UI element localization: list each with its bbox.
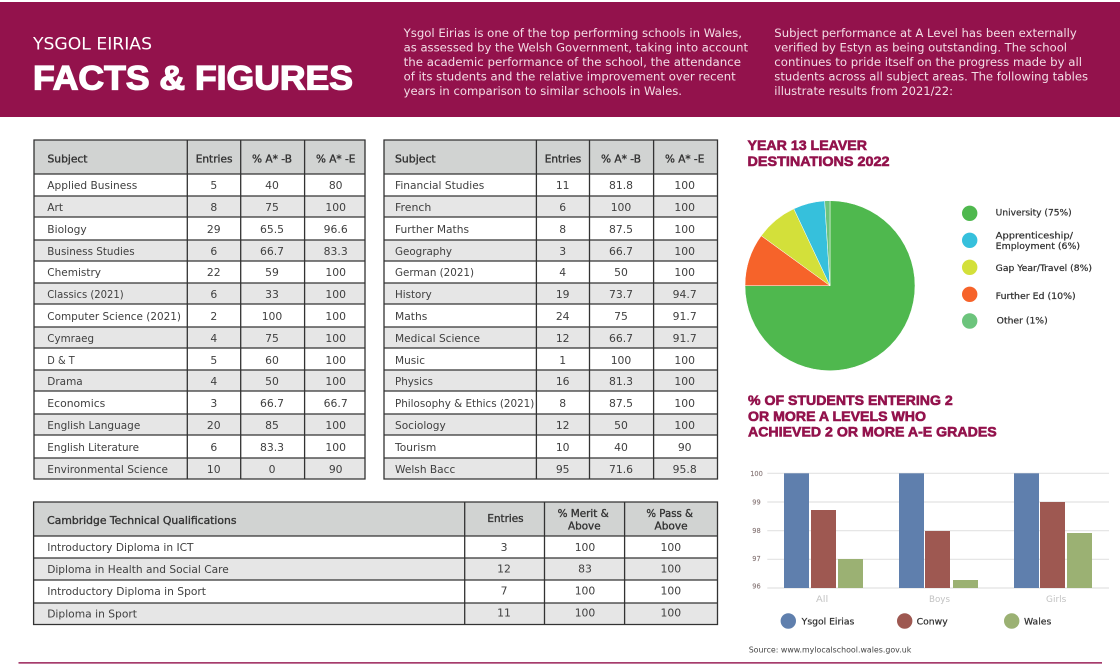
table header: [47, 508, 693, 532]
bar chart legend: Ysgol Eirias: [801, 617, 855, 627]
qualification names: Introductory Diploma in ICT: [47, 541, 194, 554]
category labels: All: [816, 595, 828, 605]
subject names: [394, 179, 534, 476]
subject names: Economics: [47, 397, 106, 410]
qualification values: 3: [501, 541, 507, 554]
subject names: Maths: [395, 310, 428, 323]
bar chart legend: Wales: [1024, 617, 1052, 627]
entries column: 6: [210, 245, 217, 258]
axis labels: 96: [752, 582, 761, 590]
qualification names: Introductory Diploma in Sport: [47, 585, 207, 598]
qualification values: [497, 541, 681, 619]
entries column: 12: [556, 419, 570, 432]
percent A* to B column: 83.3: [260, 441, 284, 454]
pie legend: Other (1%): [997, 317, 1048, 327]
category labels: Boys: [929, 595, 950, 605]
percent A* to B column: 73.7: [609, 288, 633, 301]
table header: % A* -B: [252, 153, 292, 165]
subject names: Environmental Science: [47, 463, 168, 476]
subject names: Tourism: [394, 441, 436, 454]
entries column: 8: [559, 223, 566, 236]
heading: A level grades: % OF STUDENTS ENTERING 2: [748, 392, 953, 408]
entries column: 29: [207, 223, 221, 236]
table header: % Merit &: [558, 508, 609, 520]
bar chart legend: [781, 613, 1052, 629]
heading: leaver destinations: [748, 137, 890, 169]
subject names: Geography: [395, 245, 453, 258]
percent A* to E column: 100: [674, 354, 695, 367]
qualification values: 100: [660, 563, 681, 576]
percent A* to E column: 94.7: [673, 288, 697, 301]
bars: Girls: [1014, 473, 1092, 588]
category labels: [816, 595, 1067, 605]
bar chart: A level grades: [750, 470, 1109, 605]
percent A* to E column: [324, 179, 348, 476]
title: YSGOL EIRIAS: [32, 34, 152, 54]
percent A* to E column: 100: [674, 397, 695, 410]
percent A* to E column: 91.7: [673, 310, 697, 323]
subject names: English Literature: [47, 441, 139, 454]
percent A* to B column: 40: [265, 179, 279, 192]
percent A* to B column: 50: [614, 419, 628, 432]
qualification values: 83: [578, 563, 592, 576]
qualification names: [47, 541, 229, 620]
percent A* to E column: 100: [674, 223, 695, 236]
axis labels: 98: [752, 527, 761, 535]
entries column: 6: [210, 288, 217, 301]
table header: Above: [654, 520, 688, 532]
entries column: 4: [210, 332, 217, 345]
percent A* to E column: 100: [325, 441, 346, 454]
title: FACTS & FIGURES: [33, 59, 353, 97]
table header: Entries: [196, 153, 232, 165]
entries column: 1: [559, 354, 566, 367]
table header: Entries: [487, 513, 524, 525]
percent A* to B column: 59: [265, 266, 279, 279]
table header: % Pass &: [646, 508, 693, 520]
table header: Above: [568, 520, 601, 532]
percent A* to E column: 95.8: [673, 463, 697, 476]
subject names: French: [395, 201, 431, 214]
pie legend: Employment (6%): [996, 242, 1080, 252]
subject names: Classics (2021): [47, 288, 124, 301]
qualification values: 100: [660, 606, 681, 619]
percent A* to B column: 75: [265, 201, 279, 214]
axis labels: 99: [752, 498, 761, 506]
percent A* to E column: 100: [325, 332, 346, 345]
percent A* to E column: 90: [678, 441, 692, 454]
heading: leaver destinations: DESTINATIONS 2022: [748, 153, 890, 169]
subject names: Applied Business: [47, 179, 138, 192]
qualification values: 100: [575, 606, 595, 619]
percent A* to B column: 100: [611, 201, 631, 214]
intro paragraph: school performance: years in comparison to similar schools in Wales.: [404, 84, 682, 98]
qualification values: 12: [497, 563, 511, 576]
percent A* to E column: 100: [325, 419, 346, 432]
percent A* to B column: 40: [614, 441, 628, 454]
subject names: D & T: [47, 354, 75, 367]
intro paragraph: school performance: the academic performance of the school, the attendance: [404, 55, 741, 69]
subject names: Physics: [395, 375, 433, 388]
percent A* to B column: 71.6: [609, 463, 633, 476]
percent A* to E column: 96.6: [324, 223, 348, 236]
subject names: Business Studies: [47, 245, 135, 258]
percent A* to E column: 100: [325, 288, 346, 301]
qualification values: 11: [497, 606, 511, 619]
percent A* to B column: 50: [614, 266, 628, 279]
percent A* to B column: 100: [611, 354, 631, 367]
percent A* to B column: 81.8: [609, 179, 633, 192]
intro paragraph: subject performance: illustrate results from 2021/22:: [774, 84, 953, 98]
table header: [395, 153, 705, 165]
percent A* to B column: 66.7: [260, 397, 284, 410]
subject names: Financial Studies: [395, 179, 485, 192]
entries column: 11: [556, 179, 570, 192]
table header: Subject: [48, 153, 88, 165]
entries column: 12: [556, 332, 570, 345]
percent A* to B column: 33: [265, 288, 279, 301]
heading: leaver destinations: YEAR 13 LEAVER: [748, 137, 867, 153]
entries column: 4: [210, 375, 217, 388]
intro paragraph: school performance: [403, 26, 748, 98]
entries column: 5: [210, 179, 217, 192]
entries column: 24: [556, 310, 570, 323]
percent A* to B column: [260, 179, 284, 476]
axis labels: 97: [752, 555, 761, 563]
percent A* to E column: 66.7: [324, 397, 348, 410]
entries column: 95: [556, 463, 570, 476]
entries column: 16: [556, 375, 570, 388]
intro paragraph: subject performance: continues to pride itself on the progress made by all: [774, 55, 1082, 69]
percent A* to B column: 75: [265, 332, 279, 345]
percent A* to E column: 100: [325, 375, 346, 388]
pie legend: Apprenticeship/: [996, 231, 1073, 241]
qualification values: 100: [575, 541, 595, 554]
header banner: [0, 2, 1120, 117]
percent A* to B column: 60: [265, 354, 279, 367]
qualification values: 100: [660, 585, 681, 598]
pie chart: leaver destinations: [745, 201, 915, 371]
table header: % A* -B: [601, 153, 641, 165]
bars: All: [784, 473, 863, 588]
entries column: 3: [559, 245, 566, 258]
qualification names: Diploma in Health and Social Care: [47, 563, 229, 576]
axis labels: [750, 470, 763, 590]
subject names: Welsh Bacc: [395, 463, 455, 476]
pie legend: University (75%): [996, 209, 1072, 219]
intro paragraph: subject performance: [774, 26, 1088, 98]
axis labels: 100: [750, 470, 763, 478]
percent A* to E column: 100: [325, 310, 346, 323]
title: [32, 34, 353, 97]
percent A* to B column: 87.5: [609, 397, 633, 410]
subject names: Biology: [47, 223, 87, 236]
entries column: 6: [210, 441, 217, 454]
category labels: Girls: [1046, 595, 1067, 605]
bar chart legend: Conwy: [917, 617, 948, 627]
entries column: 6: [559, 201, 566, 214]
qualification values: 100: [660, 541, 681, 554]
subject names: German (2021): [395, 266, 474, 279]
percent A* to B column: 85: [265, 419, 279, 432]
percent A* to B column: 0: [269, 463, 276, 476]
table header: Subject: [395, 153, 436, 165]
table: subjects F to W: [384, 140, 718, 479]
percent A* to B column: 87.5: [609, 223, 633, 236]
percent A* to E column: 100: [674, 179, 695, 192]
percent A* to B column: 75: [614, 310, 628, 323]
qualification values: 7: [501, 585, 507, 598]
entries column: [207, 179, 221, 476]
percent A* to B column: 100: [262, 310, 282, 323]
subject names: Art: [47, 201, 64, 214]
pie legend: [962, 206, 1092, 329]
percent A* to B column: 50: [265, 375, 279, 388]
percent A* to B column: 66.7: [260, 245, 284, 258]
percent A* to E column: 100: [674, 201, 695, 214]
qualification values: 100: [575, 585, 595, 598]
subject names: Drama: [47, 375, 83, 388]
percent A* to E column: 83.3: [324, 245, 348, 258]
entries column: 10: [556, 441, 570, 454]
qualification names: Diploma in Sport: [47, 607, 138, 620]
percent A* to B column: 81.3: [609, 375, 633, 388]
intro paragraph: subject performance: Subject performance at A Level has been externally: [774, 26, 1077, 40]
subject names: Further Maths: [395, 223, 469, 236]
table header: Entries: [545, 153, 581, 165]
entries column: 8: [559, 397, 566, 410]
percent A* to B column: 65.5: [260, 223, 284, 236]
table: subjects A to E: [34, 140, 365, 479]
entries column: 4: [559, 266, 566, 279]
percent A* to E column: 100: [674, 419, 695, 432]
bars: Boys: [899, 473, 978, 588]
entries column: 5: [210, 354, 217, 367]
entries column: 2: [210, 310, 217, 323]
intro paragraph: school performance: as assessed by the Welsh Government, taking into account: [404, 40, 748, 54]
intro paragraph: subject performance: students across all subject areas. The following tables: [774, 70, 1088, 84]
subject names: History: [395, 288, 432, 301]
intro paragraph: school performance: Ysgol Eirias is one of the top performing schools in Wales,: [403, 26, 742, 40]
subject names: Medical Science: [395, 332, 480, 345]
subject names: English Language: [47, 419, 141, 432]
percent A* to E column: [673, 179, 697, 476]
percent A* to B column: [609, 179, 633, 476]
entries column: [556, 179, 570, 476]
entries column: 22: [207, 266, 221, 279]
percent A* to E column: 91.7: [673, 332, 697, 345]
entries column: 8: [210, 201, 217, 214]
heading: A level grades: ACHIEVED 2 OR MORE A-E GRADES: [748, 424, 997, 440]
percent A* to E column: 90: [329, 463, 343, 476]
subject names: Music: [395, 354, 425, 367]
subject names: [47, 179, 181, 476]
percent A* to E column: 100: [325, 266, 346, 279]
percent A* to E column: 100: [674, 375, 695, 388]
pie legend: Gap Year/Travel (8%): [996, 264, 1092, 274]
percent A* to E column: 100: [325, 201, 346, 214]
source note: Source: www.mylocalschool.wales.gov.uk: [749, 646, 912, 655]
subject names: Philosophy & Ethics (2021): [395, 397, 534, 410]
table header: [48, 153, 356, 165]
percent A* to B column: 66.7: [609, 245, 633, 258]
heading: A level grades: OR MORE A LEVELS WHO: [748, 408, 926, 424]
table: Cambridge Technical Qualifications: [34, 502, 718, 624]
entries column: 10: [207, 463, 221, 476]
table header: % A* -E: [665, 153, 705, 165]
percent A* to E column: 100: [674, 245, 695, 258]
percent A* to E column: 100: [325, 354, 346, 367]
intro paragraph: school performance: of its students and the relative improvement over recent: [404, 70, 736, 84]
entries column: 3: [210, 397, 217, 410]
subject names: Sociology: [395, 419, 446, 432]
intro paragraph: subject performance: verified by Estyn as being outstanding. The school: [774, 40, 1067, 54]
percent A* to E column: 100: [674, 266, 695, 279]
subject names: Computer Science (2021): [47, 310, 181, 323]
pie legend: Further Ed (10%): [996, 292, 1076, 302]
percent A* to B column: 66.7: [609, 332, 633, 345]
table header: % A* -E: [316, 153, 356, 165]
subject names: Cymraeg: [47, 332, 94, 345]
heading: A level grades: [748, 392, 997, 440]
table header: Cambridge Technical Qualifications: [47, 515, 237, 527]
subject names: Chemistry: [47, 266, 102, 279]
percent A* to E column: 80: [329, 179, 343, 192]
entries column: 20: [207, 419, 221, 432]
entries column: 19: [556, 288, 570, 301]
